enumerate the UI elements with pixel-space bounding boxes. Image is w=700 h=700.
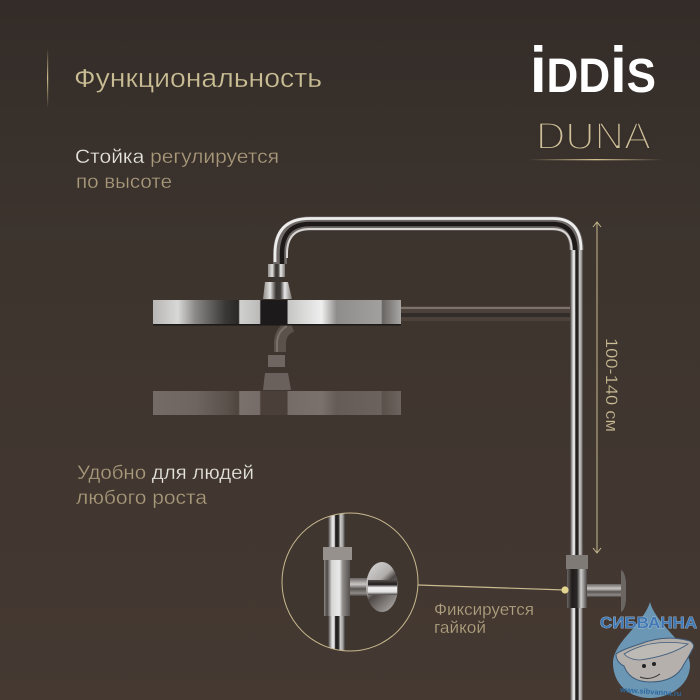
callout text: fixed: Фиксируется: [434, 601, 534, 619]
ghost nut: [268, 355, 285, 367]
cone: [263, 282, 292, 299]
detail lens: [282, 513, 418, 651]
valve stem: [587, 584, 621, 597]
ghost arm: [280, 326, 292, 352]
lens wall plate: [366, 562, 398, 612]
lens collar: [323, 547, 352, 560]
watermark drop: [613, 602, 690, 698]
logo: DUNA: DUNA: [536, 116, 652, 158]
height range label: 100-140 см: [602, 338, 621, 432]
heading rule: [47, 48, 48, 108]
watermark: [600, 602, 697, 698]
disc: [153, 300, 401, 325]
ghost horizontal pipe: [400, 306, 570, 321]
swivel nut: [268, 264, 285, 277]
logo: IDDIS: iDDiS: [530, 33, 656, 106]
clamp body: [567, 569, 587, 608]
callout text: nut: гайкой: [434, 619, 486, 637]
watermark tub rim: [624, 642, 688, 660]
text block: adjustable rack: Стойка регулируется: [75, 147, 279, 168]
text block: height continuation: по высоте: [76, 172, 172, 193]
arm dark band: [282, 224, 576, 264]
top horizontal arm and bends: [280, 224, 576, 264]
lens wall stem: [350, 578, 367, 596]
wall plate: [621, 570, 626, 612]
watermark face: [640, 662, 660, 678]
watermark bathtub: [616, 638, 694, 682]
vertical riser: [570, 250, 583, 700]
lens pipe: [328, 513, 345, 651]
watermark name: СИБВАННА: [600, 615, 697, 632]
callout leader: [418, 585, 569, 594]
lens valve barrel: [368, 580, 397, 595]
logo rule: [528, 159, 663, 160]
ghost disc: [153, 391, 401, 415]
ghost shower head (lower position): [153, 326, 401, 415]
title: Функциональность: [74, 65, 322, 93]
arm lower highlight: [287, 229, 572, 258]
shower rack pipe: [275, 218, 583, 700]
arm upper highlight: [275, 218, 581, 262]
watermark url: www.sibvanna.ru: [619, 685, 682, 698]
shower head: [153, 264, 401, 326]
text block: comfort: Удобно для людей: [77, 463, 254, 484]
text block: any height: любого роста: [76, 488, 207, 509]
height range arrow: [593, 222, 601, 553]
ghost cone: [263, 373, 291, 390]
clamp collar: [566, 555, 588, 569]
bracket on riser: [566, 555, 626, 612]
neck: [271, 277, 282, 281]
lens clamp: [324, 560, 350, 616]
